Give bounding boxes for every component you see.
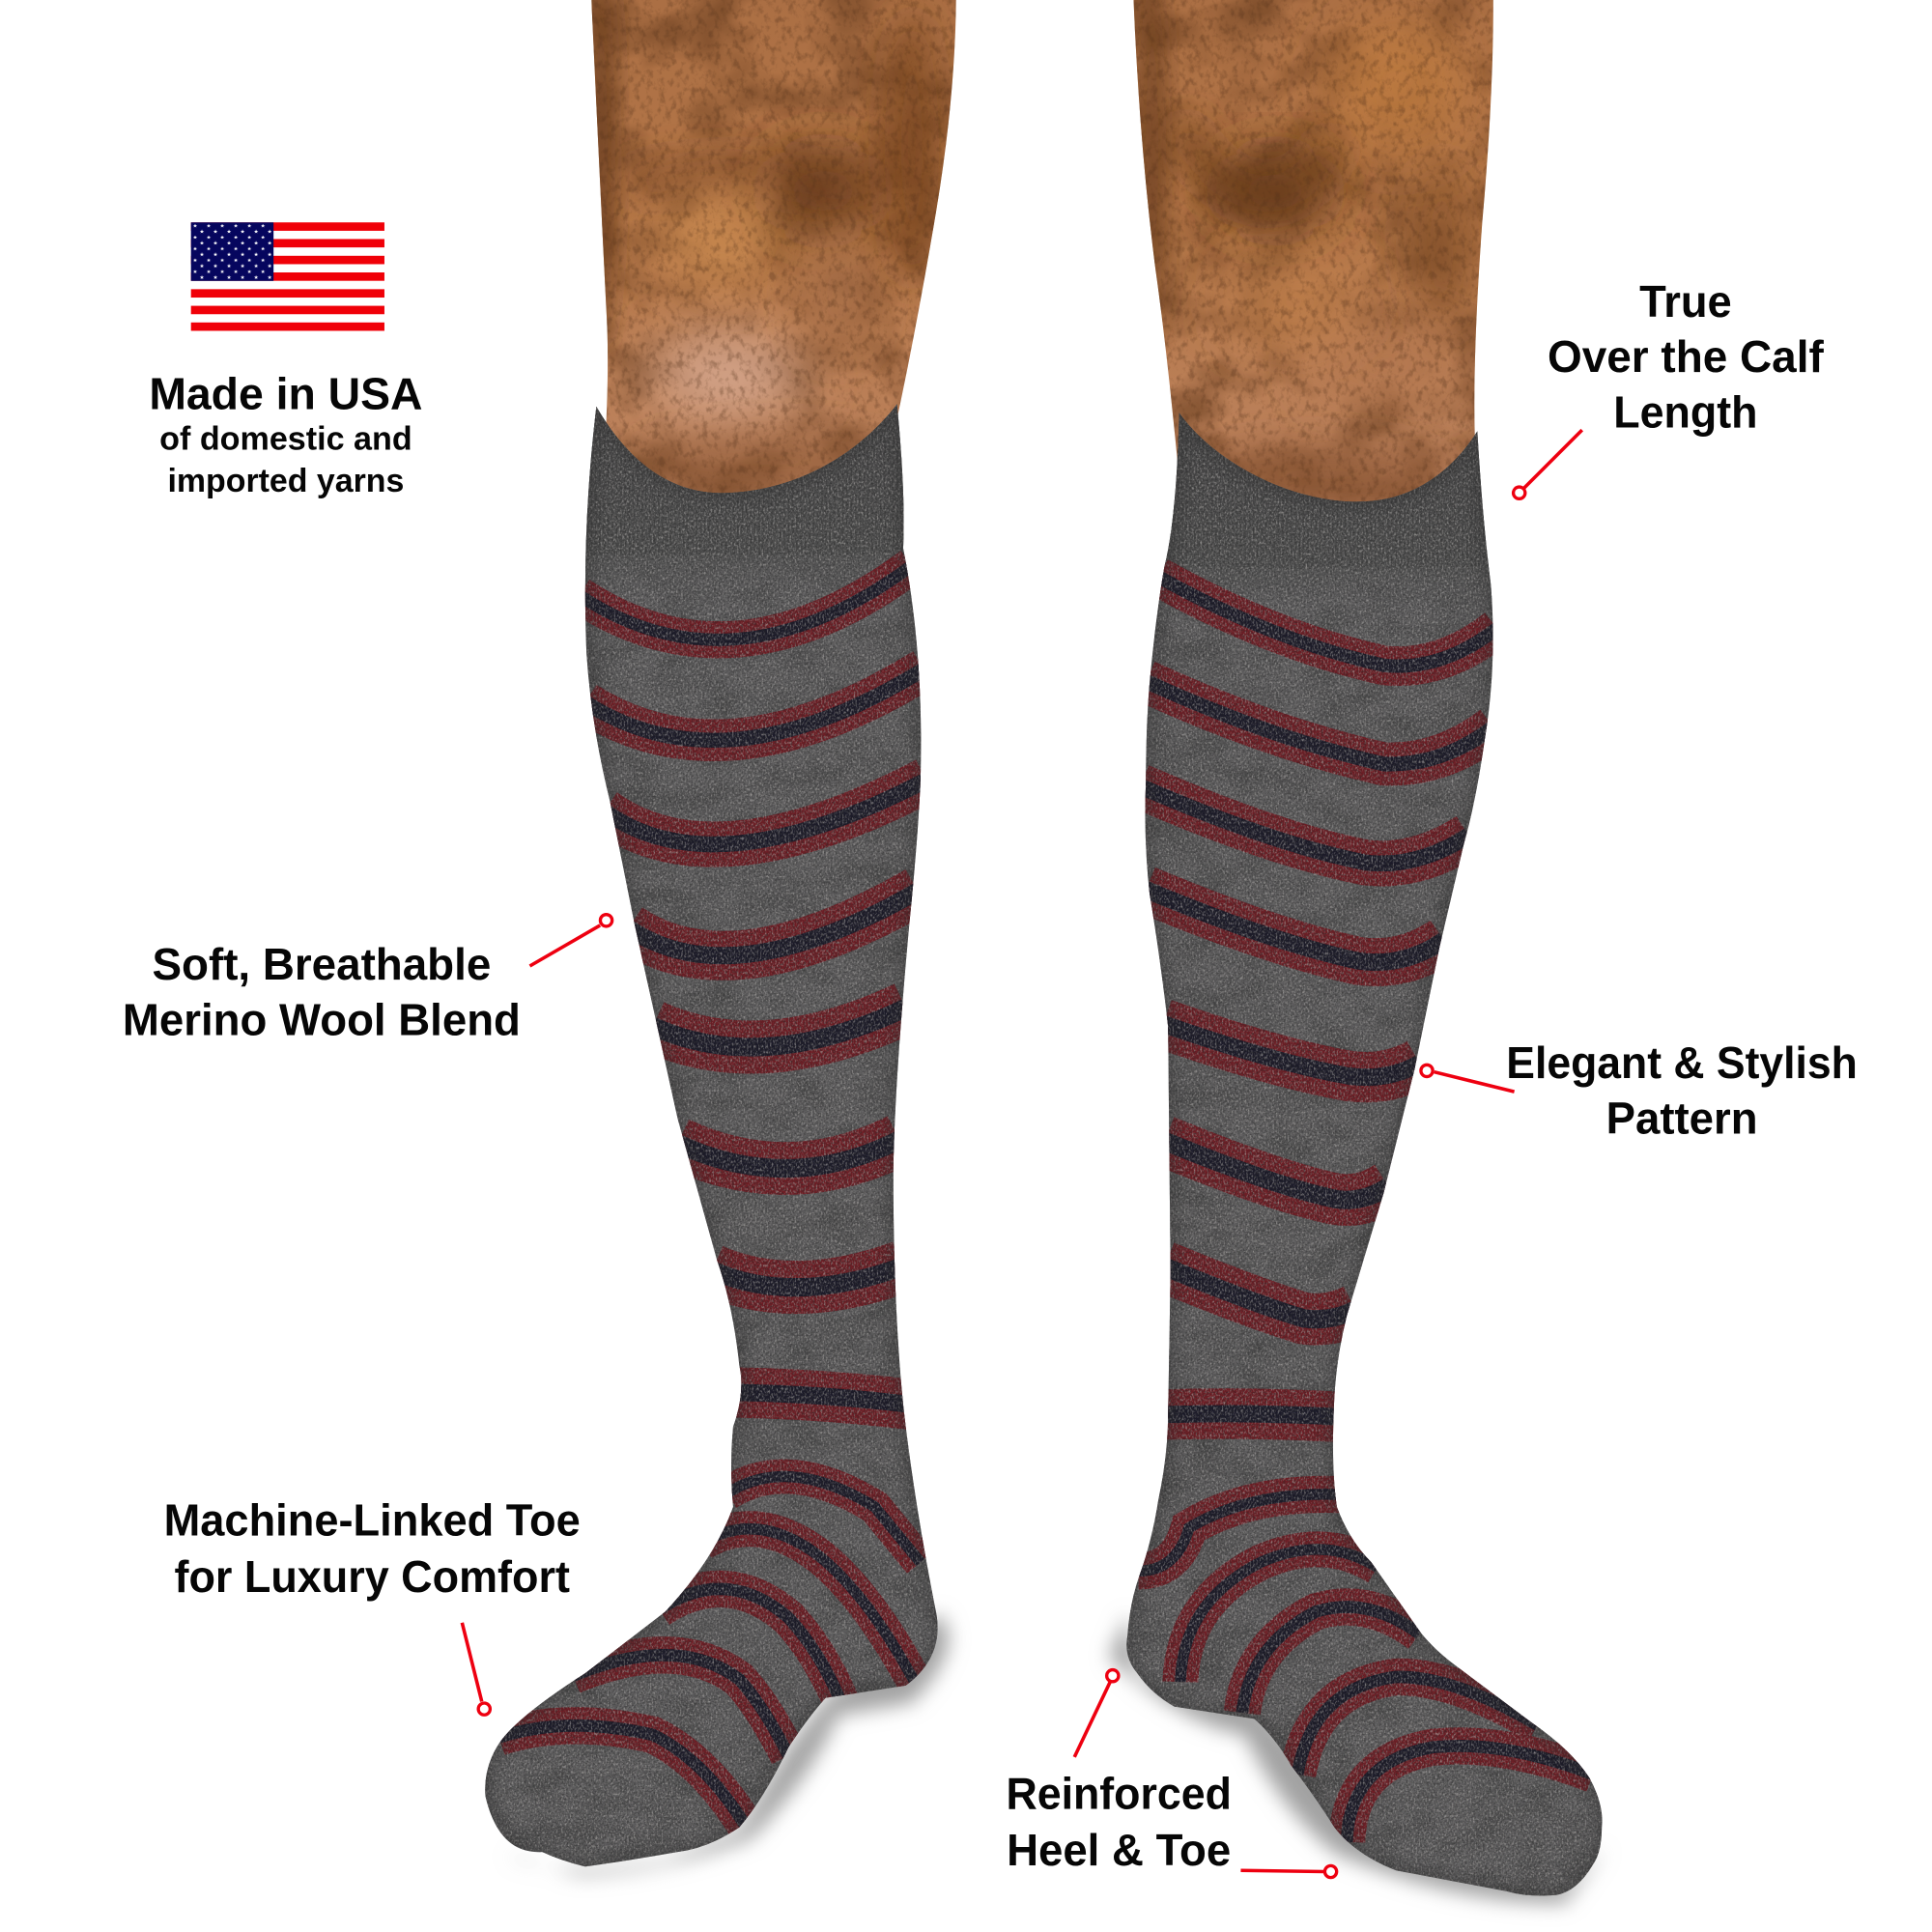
icon: American flag xyxy=(191,222,384,330)
callout: True Over the Calf Length: True xyxy=(1639,276,1732,327)
left leg skin xyxy=(591,0,956,493)
text: Made in USA: Made in USA xyxy=(149,368,422,418)
callout: True Over the Calf Length xyxy=(1514,276,1824,498)
text: Made in USA: of domestic and xyxy=(159,421,412,458)
callout: Reinforced Heel & Toe xyxy=(1006,1670,1337,1878)
callout: Reinforced Heel & Toe: Reinforced xyxy=(1006,1768,1232,1818)
callout: Elegant & Stylish Pattern: Elegant & Stylish xyxy=(1506,1037,1858,1088)
callout: Soft, Breathable Merino Wool Blend: Soft, Breathable xyxy=(153,939,491,989)
right sock xyxy=(1115,407,1620,1910)
ground shadow: right foot xyxy=(1109,1614,1605,1904)
right sock stripes xyxy=(1139,577,1593,1842)
callout: Machine-Linked Toe for Luxury Comfort xyxy=(164,1494,581,1715)
left sock stripes xyxy=(499,565,926,1836)
left sock xyxy=(469,394,961,1886)
callout: Elegant & Stylish Pattern xyxy=(1421,1037,1858,1143)
callout: Machine-Linked Toe for Luxury Comfort: for Luxury Comfort xyxy=(174,1551,570,1602)
text: Made in USA: imported yarns xyxy=(167,463,404,499)
text: Made in USA xyxy=(149,368,423,499)
callout: Elegant & Stylish Pattern: Pattern xyxy=(1606,1093,1758,1143)
ground shadow: left foot xyxy=(505,1614,949,1875)
callout: Machine-Linked Toe for Luxury Comfort: Machine-Linked Toe xyxy=(164,1494,581,1545)
callout: Soft, Breathable Merino Wool Blend xyxy=(123,915,612,1044)
callout: True Over the Calf Length: Length xyxy=(1613,387,1758,438)
callout: True Over the Calf Length: Over the Calf xyxy=(1548,331,1824,382)
callout: Soft, Breathable Merino Wool Blend: Merino Wool Blend xyxy=(123,994,521,1044)
right leg skin xyxy=(1134,0,1493,502)
callout: Reinforced Heel & Toe: Heel & Toe xyxy=(1007,1825,1231,1875)
